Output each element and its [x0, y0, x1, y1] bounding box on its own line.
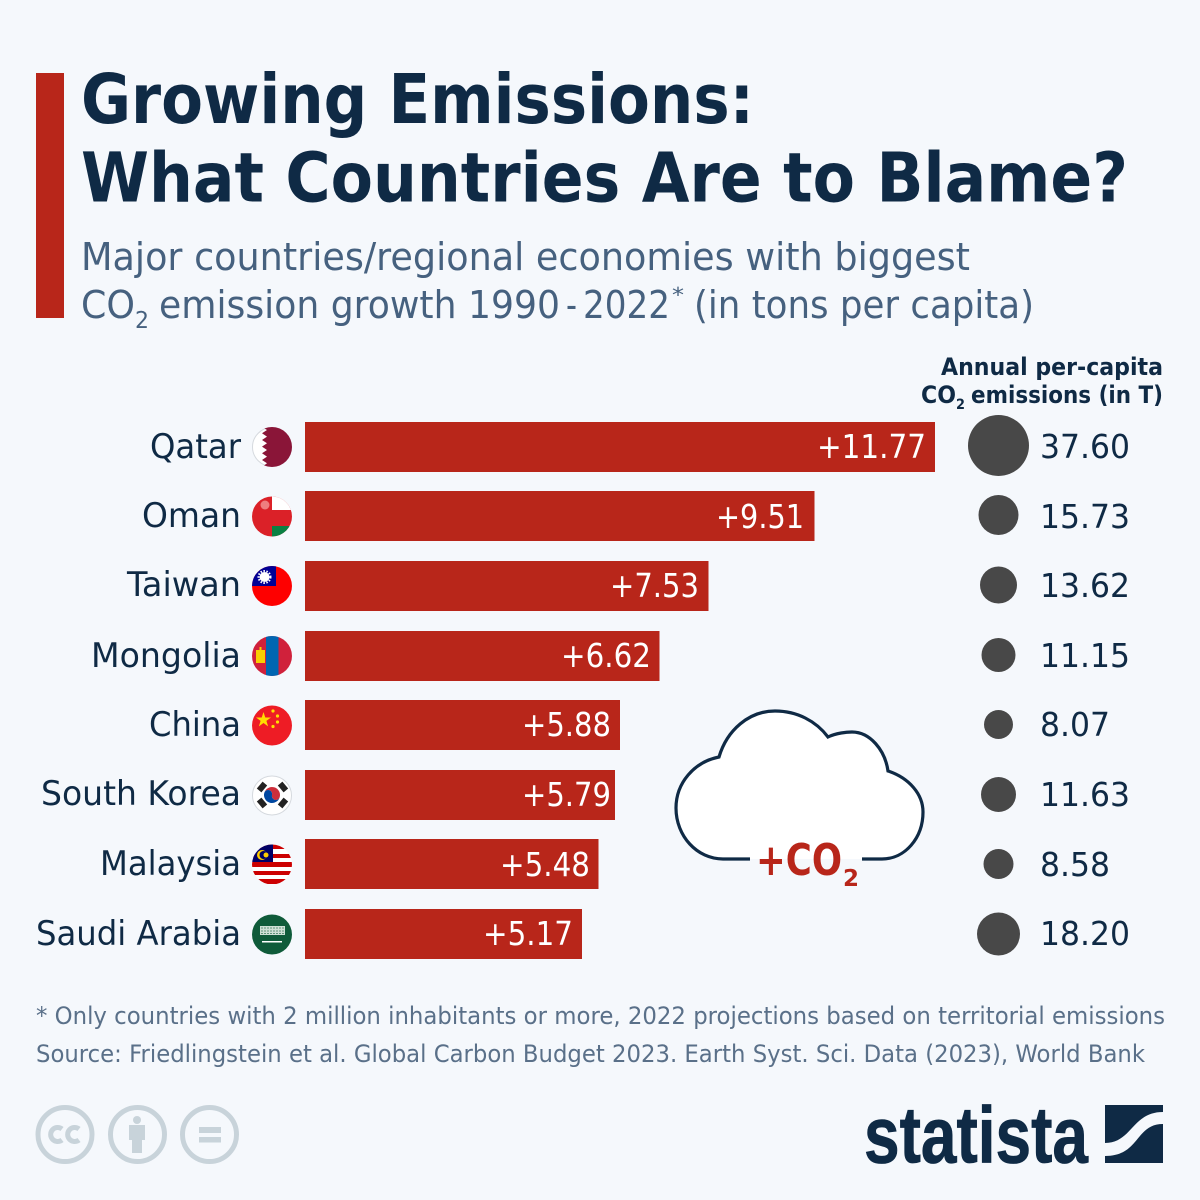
- icon: creative commons licence: [38, 1108, 236, 1162]
- per-capita emission values: 37.60: [1040, 427, 1130, 466]
- icon: CO2 cloud: 2: [843, 866, 859, 892]
- bar: South Korea: +5.79: [522, 775, 611, 814]
- icon: flag of Oman: [252, 496, 292, 537]
- subtitle: emission growth 1990: [159, 283, 560, 327]
- column header: annual per-capita emissions: emissions (in T): [971, 381, 1163, 409]
- icon: flag of Malaysia: [252, 844, 292, 885]
- per-capita emission values: [1040, 427, 1130, 953]
- accent bar: [36, 73, 64, 318]
- bar: Mongolia: +6.62: [561, 636, 651, 675]
- column header: annual per-capita emissions: 2: [956, 397, 965, 413]
- bar: Qatar: +11.77: [817, 427, 926, 466]
- country labels: Qatar: [150, 427, 241, 467]
- column header: annual per-capita emissions: [921, 353, 1163, 413]
- subtitle: CO: [81, 283, 135, 327]
- column header: annual per-capita emissions: CO: [921, 381, 956, 409]
- per-capita emission circles: [968, 415, 1029, 956]
- bar: Taiwan: +7.53: [610, 566, 699, 605]
- subtitle: -: [566, 283, 577, 327]
- country labels: Malaysia: [100, 844, 241, 884]
- per-capita emission values: 18.20: [1040, 914, 1130, 953]
- per-capita emission values: 11.15: [1040, 636, 1130, 675]
- country labels: Oman: [142, 496, 241, 536]
- per-capita emission values: 8.58: [1040, 845, 1110, 884]
- bar: Saudi Arabia: [305, 909, 582, 959]
- bar: Taiwan: [305, 561, 708, 611]
- subtitle: Major countries/regional economies with biggest: [81, 235, 970, 279]
- country labels: South Korea: [41, 774, 241, 814]
- column header: annual per-capita emissions: Annual per-capita: [941, 353, 1163, 381]
- icon: flag of South Korea: [252, 776, 292, 815]
- bar: Malaysia: +5.48: [500, 845, 590, 884]
- bar chart: emission growth: [305, 422, 935, 959]
- icon: flag of Qatar: [252, 427, 292, 467]
- subtitle: *: [672, 283, 684, 307]
- per-capita emission values: 8.07: [1040, 705, 1110, 744]
- title: [81, 60, 1128, 218]
- country labels: Taiwan: [126, 565, 241, 605]
- country labels: [36, 427, 241, 954]
- title: Growing Emissions:: [81, 60, 754, 140]
- bar: Mongolia: [305, 631, 660, 681]
- per-capita emission values: 13.62: [1040, 566, 1130, 605]
- bar: Malaysia: [305, 839, 598, 889]
- country labels: China: [149, 705, 241, 745]
- per-capita emission values: 15.73: [1040, 497, 1130, 536]
- footnote and source: * Only countries with 2 million inhabitants or more, 2022 projections based on territorial emissions: [36, 1002, 1165, 1030]
- footnote and source: [36, 1002, 1165, 1068]
- bar: China: [305, 700, 620, 750]
- subtitle: [81, 235, 1034, 334]
- bar: Saudi Arabia: +5.17: [483, 914, 573, 953]
- bar: Oman: [305, 491, 814, 541]
- subtitle: 2022: [583, 283, 670, 327]
- footnote and source: Source: Friedlingstein et al. Global Carbon Budget 2023. Earth Syst. Sci. Data (2023), World Bank: [36, 1040, 1145, 1068]
- icon: flag of Saudi Arabia: [252, 914, 292, 955]
- icon: CO2 cloud: +CO: [756, 835, 842, 886]
- country labels: Saudi Arabia: [36, 914, 241, 954]
- icon: flag of Mongolia: [252, 636, 292, 676]
- country labels: Mongolia: [91, 636, 241, 676]
- icon: flag of Taiwan: [252, 566, 292, 606]
- bar: South Korea: [305, 770, 615, 820]
- bar: China: +5.88: [522, 705, 611, 744]
- subtitle: 2: [135, 308, 149, 334]
- subtitle: (in tons per capita): [694, 283, 1034, 327]
- per-capita emission values: 11.63: [1040, 775, 1130, 814]
- bar: Oman: +9.51: [716, 497, 804, 536]
- statista logo: statista: [864, 1090, 1088, 1180]
- bar: Qatar: [305, 422, 935, 472]
- icon: CO2 cloud: [676, 711, 923, 892]
- icon: flag of China: [252, 705, 292, 746]
